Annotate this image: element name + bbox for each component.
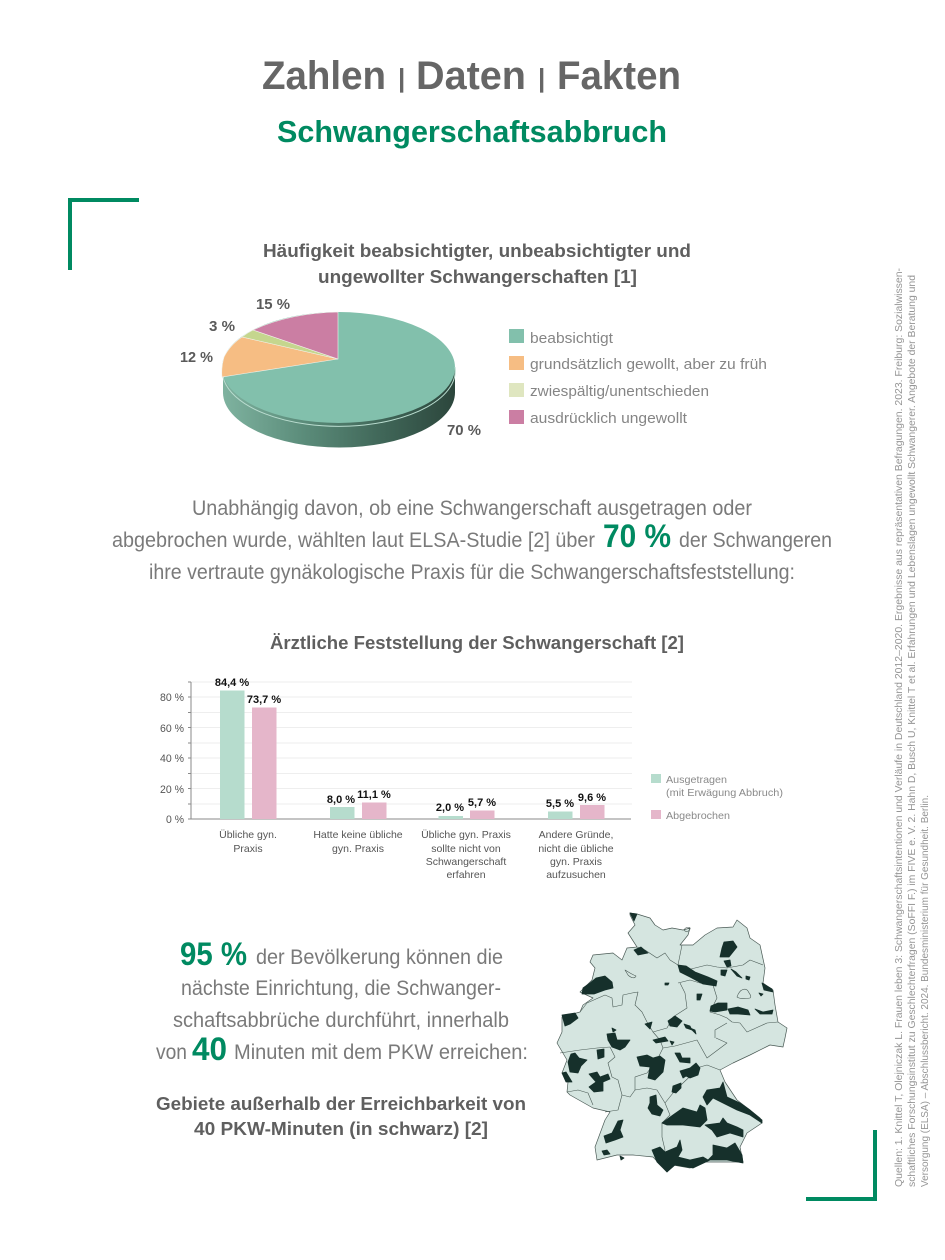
pie chart: 15 % xyxy=(256,296,290,313)
text block: 70 %: der Schwangeren xyxy=(679,529,832,552)
pie legend: ausdrücklich ungewollt xyxy=(530,410,688,427)
bar chart: Übliche gyn. Praxis xyxy=(421,829,511,841)
sources: schaftliches Forschungsinstitut zu Geschlechterfragen (SoFFI F.) im FIVE e. V. 2. Hahn D, Busch U, Knittel T et al. Erfahrungen und Lebenslagen ungewollt Schwangerer. Angebote der Beratung und xyxy=(906,275,918,1187)
bar chart: erfahren xyxy=(446,869,486,881)
map caption: 40 PKW-Minuten (in schwarz) [2] xyxy=(194,1119,488,1139)
text block: 70 % xyxy=(112,497,832,584)
bar chart: sollte nicht von xyxy=(431,843,501,855)
bar chart: Hatte keine übliche xyxy=(313,829,403,841)
title: Zahlen xyxy=(262,54,386,98)
title xyxy=(262,54,681,98)
bar chart: aufzusuchen xyxy=(546,869,606,881)
bar chart: gyn. Praxis xyxy=(332,843,384,855)
text block: 95 %: von xyxy=(156,1041,187,1064)
text block: 95 %: 40 xyxy=(192,1031,227,1067)
corner bracket top left xyxy=(70,200,139,270)
map: Germany xyxy=(557,913,787,1172)
bar chart legend: Abgebrochen xyxy=(666,810,730,822)
heading: bar chart: Ärztliche Feststellung der Schwangerschaft [2] xyxy=(270,633,684,653)
sources: Quellen: 1. Knittel T, Olejniczak L. Frauen leben 3: Schwangerschaftsintentionen und Verläufe in Deutschland 2012–2020. Ergebnisse aus repräsentativen Befragungen. 2023. Freiburg: Sozialwissen- xyxy=(893,268,905,1187)
corner bracket bottom right xyxy=(806,1130,875,1199)
bar chart: nicht die übliche xyxy=(538,843,614,855)
sources xyxy=(893,268,931,1187)
bar chart: 40 % xyxy=(160,753,184,765)
title: | xyxy=(398,63,405,93)
text block: 95 % xyxy=(156,936,528,1067)
subtitle: Schwangerschaftsabbruch xyxy=(277,114,667,149)
title: Fakten xyxy=(557,54,681,98)
pie chart: 12 % xyxy=(180,349,213,366)
pie legend xyxy=(509,329,767,427)
heading: pie chart: ungewollter Schwangerschaften [1] xyxy=(318,267,637,287)
bar chart: Praxis xyxy=(233,843,263,855)
pie chart: 3 % xyxy=(209,318,235,335)
bar chart: 9,6 % xyxy=(578,792,606,804)
map caption: Gebiete außerhalb der Erreichbarkeit von xyxy=(156,1094,526,1114)
bar chart: 80 % xyxy=(160,692,184,704)
bar chart legend xyxy=(651,774,783,822)
heading: pie chart: Häufigkeit beabsichtigter, unbeabsichtigter und xyxy=(263,241,691,261)
heading: pie chart xyxy=(263,241,691,287)
text block: 95 %: Minuten mit dem PKW erreichen: xyxy=(234,1041,528,1064)
map caption xyxy=(156,1094,526,1139)
pie legend: beabsichtigt xyxy=(530,330,614,347)
bar chart: 84,4 % xyxy=(215,677,249,689)
text block: 95 %: schaftsabbrüche durchführt, innerhalb xyxy=(173,1009,509,1032)
bar chart: Andere Gründe, xyxy=(539,829,613,841)
pie legend: zwiespältig/unentschieden xyxy=(530,383,709,400)
bar chart xyxy=(160,677,632,881)
text block: 70 %: 70 % xyxy=(603,518,671,554)
sources: Versorgung (ELSA) – Abschlussbericht. 2024. Bundesministerium für Gesundheit. Berlin. xyxy=(919,795,931,1187)
pie chart xyxy=(180,296,481,448)
pie legend: grundsätzlich gewollt, aber zu früh xyxy=(530,356,767,373)
bar chart: gyn. Praxis xyxy=(550,856,602,868)
bar chart: 73,7 % xyxy=(247,694,281,706)
title: Daten xyxy=(416,54,526,98)
text block: 70 %: ihre vertraute gynäkologische Praxis für die Schwangerschaftsfeststellung: xyxy=(149,561,795,584)
bar chart: 5,5 % xyxy=(546,798,574,810)
text block: 95 %: 95 % xyxy=(180,936,247,972)
bar chart: 0 % xyxy=(166,814,184,826)
bar chart legend: Ausgetragen xyxy=(666,774,727,786)
bar chart: 11,1 % xyxy=(357,789,391,801)
text block: 70 %: Unabhängig davon, ob eine Schwangerschaft ausgetragen oder xyxy=(192,497,752,520)
title: | xyxy=(538,63,545,93)
text block: 95 %: nächste Einrichtung, die Schwanger- xyxy=(181,977,501,1000)
bar chart: 60 % xyxy=(160,723,184,735)
bar chart: 5,7 % xyxy=(468,797,496,809)
bar chart: 20 % xyxy=(160,784,184,796)
bar chart: Schwangerschaft xyxy=(426,856,506,868)
text block: 70 %: abgebrochen wurde, wählten laut ELSA-Studie [2] über xyxy=(112,529,595,552)
pie chart: 70 % xyxy=(447,422,481,439)
text block: 95 %: der Bevölkerung können die xyxy=(256,946,503,969)
bar chart: 2,0 % xyxy=(436,802,464,814)
bar chart legend: (mit Erwägung Abbruch) xyxy=(666,787,783,799)
bar chart: Übliche gyn. xyxy=(219,829,277,841)
bar chart: 8,0 % xyxy=(327,794,355,806)
